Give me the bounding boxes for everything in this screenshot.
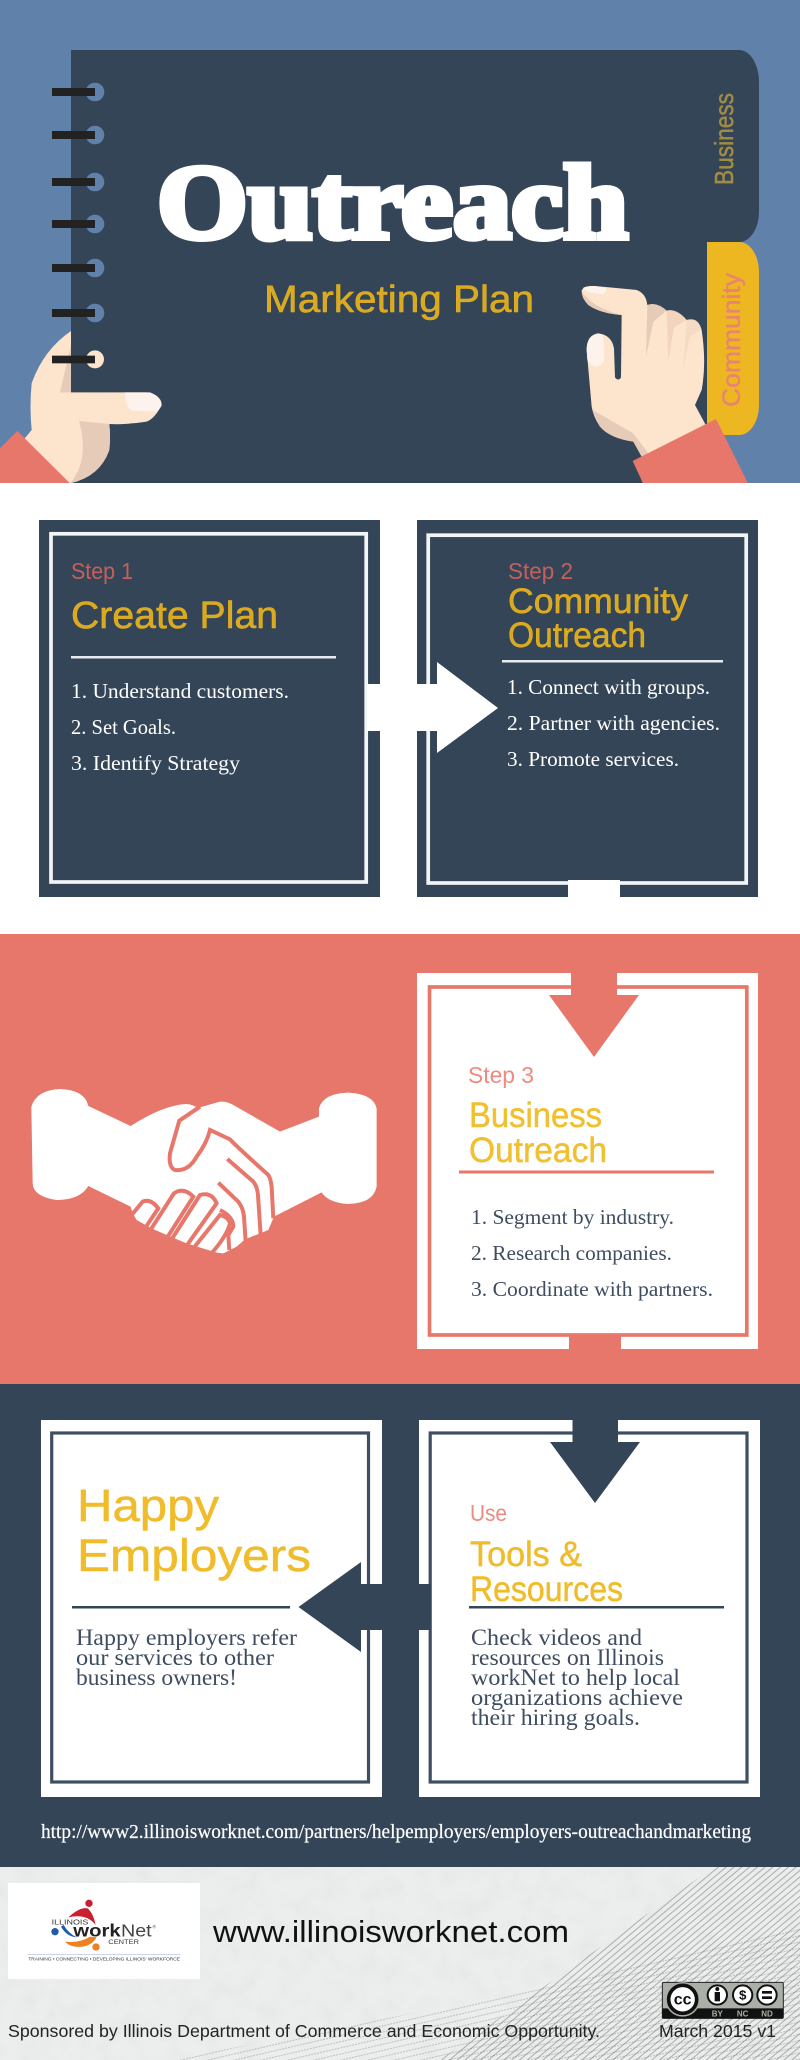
card: step 2 community outreach: Community [508,582,689,621]
card: happy employers: Employers [77,1530,311,1581]
card: step 3 business outreach: 3. Coordinate with partners. [471,1277,713,1301]
card: step 3 business outreach: Step 3 [468,1062,534,1088]
card: step 1 create plan: 2. Set Goals. [71,715,176,739]
card: tools and resources: resources on Illinois [471,1645,664,1670]
card: step 3 business outreach: Outreach [469,1131,607,1170]
subtitle: Marketing Plan [264,279,534,321]
panel: hero cover [0,0,800,484]
card: tools and resources [419,1420,760,1797]
card: step 2 community outreach: 2. Partner with agencies. [507,711,720,735]
card: tools and resources: Check videos and [471,1625,643,1650]
card: tools and resources: Use [470,1500,507,1526]
website address: www.illinoisworknet.com [212,1914,569,1949]
card: step 1 create plan [39,520,380,897]
notebook cover [71,50,759,483]
card: happy employers: business owners! [76,1665,237,1690]
link: url: http://www2.illinoisworknet.com/partners/helpemployers/employers-outreachandmarketing [41,1821,751,1843]
logo: illinois worknet center: work [72,1921,121,1941]
card: happy employers: Happy employers refer [76,1625,297,1650]
card: tools and resources: Tools & [470,1535,582,1574]
panel: step 3 section [0,934,800,1384]
card: step 3 business outreach: Business [469,1096,602,1135]
card: step 2 community outreach: Outreach [508,616,646,655]
card: step 3 business outreach: 1. Segment by industry. [471,1205,674,1229]
icon: creative commons badge: NC [737,2010,749,2019]
card: step 1 create plan: 3. Identify Strategy [71,751,241,775]
arrow: step 1 to step 2 [367,662,498,753]
sponsor note: Sponsored by Illinois Department of Commerce and Economic Opportunity. [8,2021,600,2041]
card: tools and resources: their hiring goals. [471,1705,640,1730]
card: tools and resources: organizations achieve [471,1685,683,1710]
card: step 2 community outreach: 1. Connect with groups. [507,675,710,699]
card: step 1 create plan: Step 1 [71,558,133,584]
panel: results section [0,1384,800,1867]
card: happy employers: our services to other [76,1645,274,1670]
icon: creative commons badge: BY [712,2010,724,2019]
logo: illinois worknet center: CENTER [108,1939,139,1946]
arrow: step 2 to step 3 [549,973,639,1057]
panel: footer [0,1867,800,2060]
title: Outreach [157,144,628,261]
logo: illinois worknet center: Net [121,1921,152,1941]
tab: community [707,242,759,435]
arrow: tools to happy employers [298,1562,431,1652]
icon: creative commons badge [662,1982,783,2019]
icon: creative commons badge: $ [739,1988,747,2003]
icon: left hand [0,331,162,484]
icon: creative commons badge: ND [761,2010,773,2019]
arrow: step 3 to tools [550,1420,640,1503]
icon: creative commons badge: cc [674,1992,692,2009]
logo: illinois worknet center [8,1883,200,1979]
version date: March 2015 v1 [659,2021,776,2041]
card: step 1 create plan: 1. Understand customers. [71,679,289,703]
logo: illinois worknet center: ® [153,1923,157,1929]
logo: illinois worknet center: ILLINOIS [52,1917,88,1926]
card: tools and resources: workNet to help local [471,1665,680,1690]
card: tools and resources: Resources [470,1570,623,1609]
card: step 3 business outreach [417,973,758,1349]
icon: right hand [582,286,748,484]
card: step 2 community outreach [417,520,758,897]
logo: illinois worknet center: TRAINING • CONNECTING • DEVELOPING ILLINOIS' WORKFORCE [28,1957,180,1962]
card: step 3 business outreach: 2. Research companies. [471,1241,672,1265]
icon: handshake [31,1089,377,1255]
tab label: business: Business [709,93,739,185]
spiral rings [52,83,104,322]
card: happy employers [41,1420,382,1797]
card: happy employers: Happy [77,1480,220,1531]
card: step 2 community outreach: Step 2 [508,558,573,584]
tab: community: Community [718,272,746,407]
panel: step 1 and step 2 section [0,483,800,934]
card: step 2 community outreach: 3. Promote services. [507,747,679,771]
card: step 1 create plan: Create Plan [71,595,278,637]
